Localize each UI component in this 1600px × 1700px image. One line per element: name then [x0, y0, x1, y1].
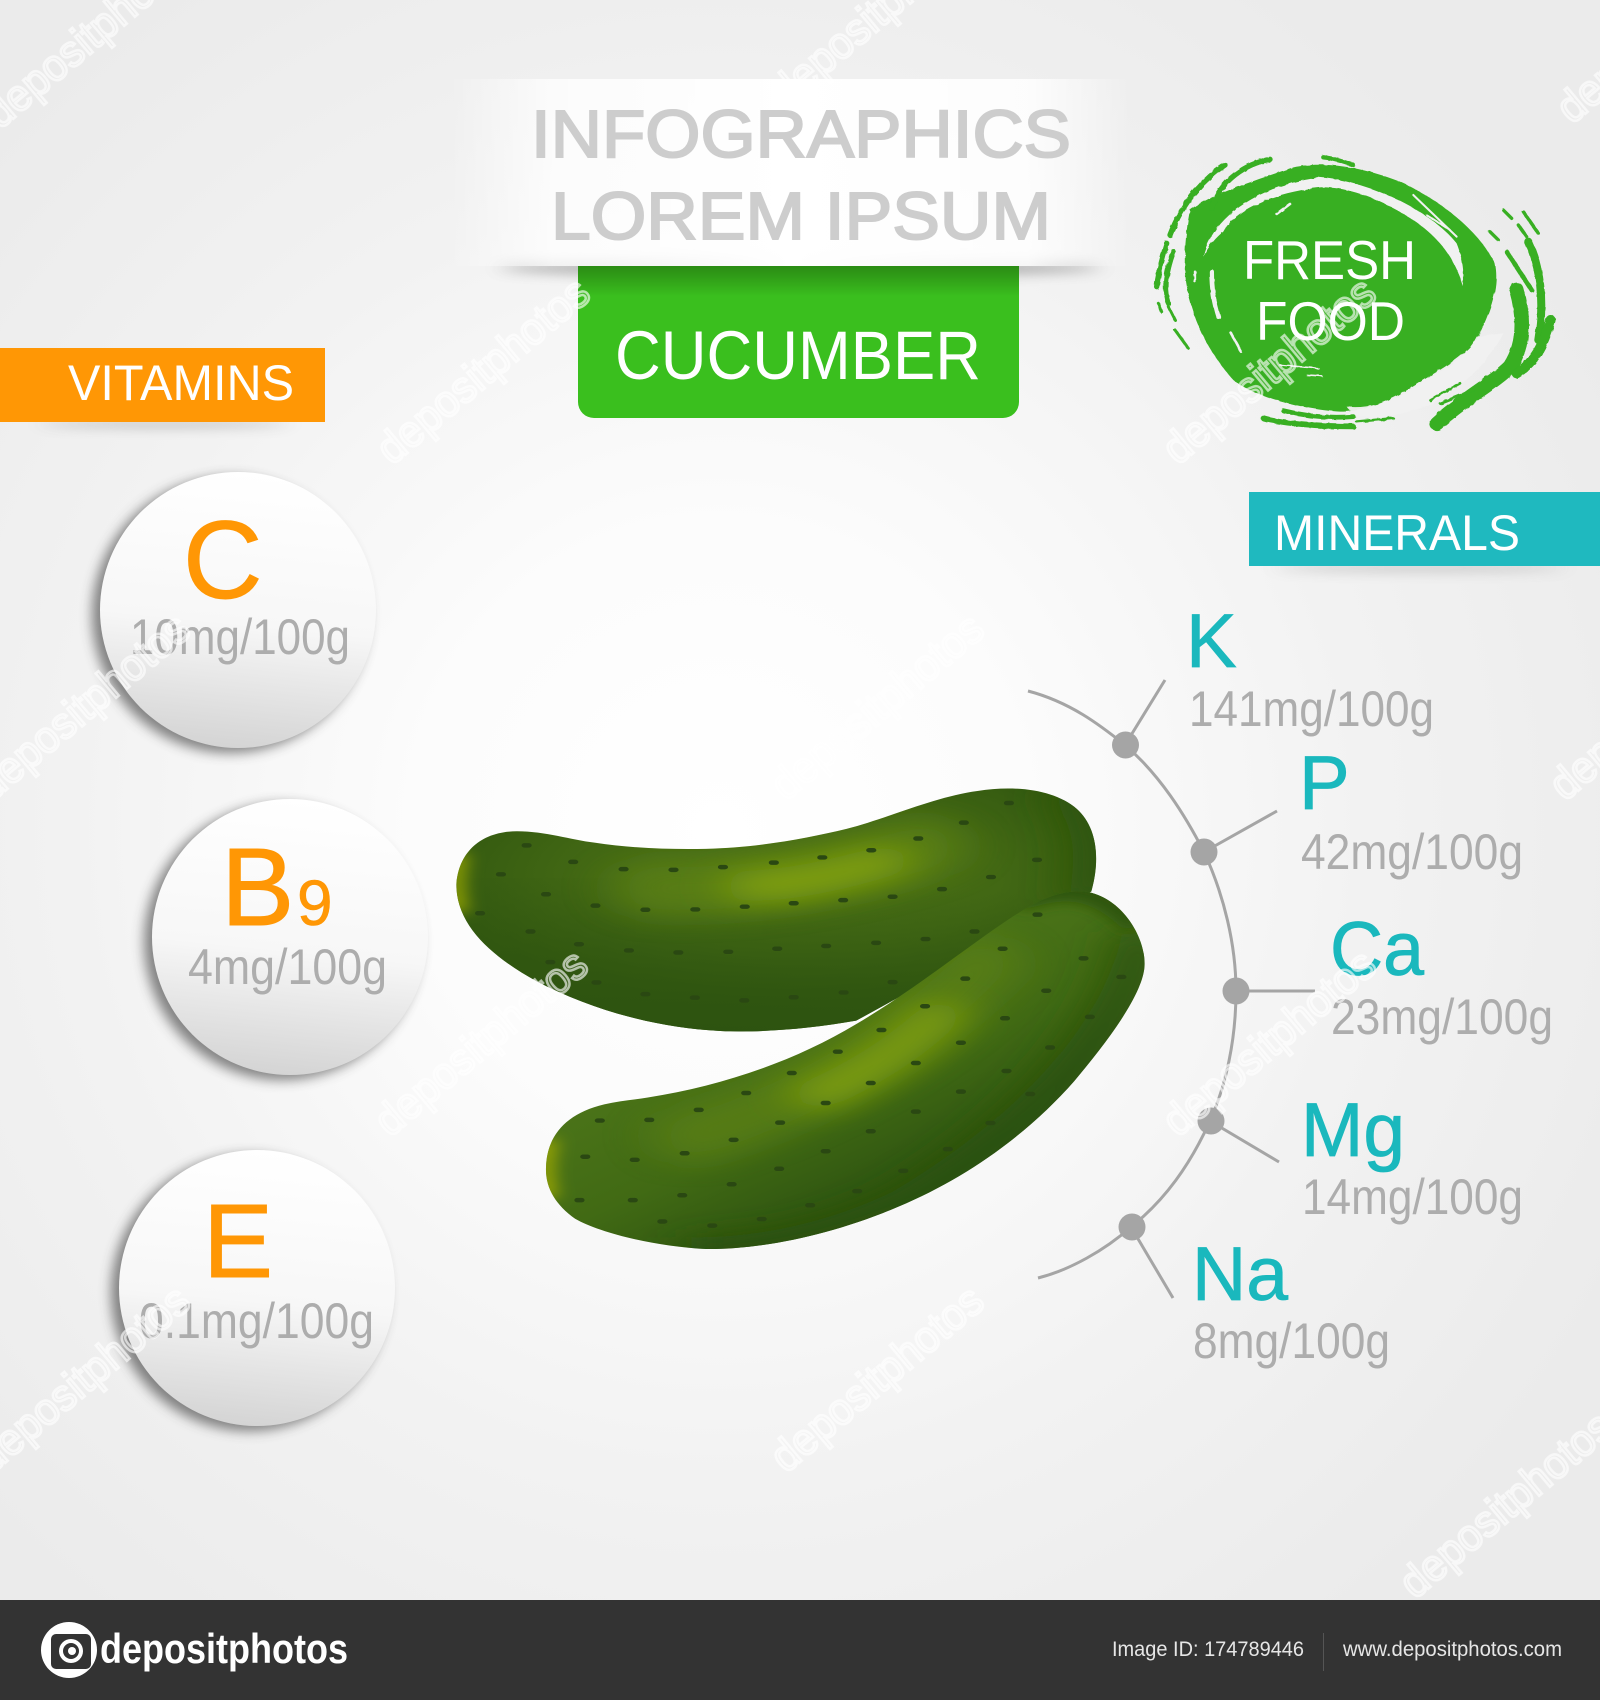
stock watermark overlay: depositphotos [365, 940, 597, 1146]
stamp text: fresh food [1243, 229, 1416, 352]
vitamin E badge: E [203, 1183, 273, 1300]
mineral P [1299, 741, 1523, 880]
footer brand text: depositphotos [100, 1625, 348, 1672]
icon: fresh food stamp [1157, 157, 1551, 427]
vitamin B9 badge: 4mg/100g [188, 939, 387, 995]
panel: minerals label: MINERALS [1274, 505, 1520, 561]
vitamin C badge: 10mg/100g [130, 609, 350, 665]
mineral Mg: Mg [1301, 1088, 1405, 1173]
mineral Mg: 14mg/100g [1302, 1169, 1523, 1225]
heading: cucumber: CUCUMBER [615, 317, 981, 394]
vitamin B9 badge [144, 799, 428, 1080]
vitamin C badge [92, 472, 376, 753]
back cucumber [456, 788, 1096, 1032]
mineral Ca: Ca [1330, 907, 1425, 992]
vitamin B9 badge: 9 [297, 867, 333, 939]
illustration: cucumbers [420, 785, 1145, 1253]
panel: minerals label [1249, 492, 1600, 571]
panel: title card [450, 79, 1130, 266]
mineral Na [1192, 1232, 1390, 1369]
mineral P: 42mg/100g [1301, 824, 1523, 880]
mineral K: K [1186, 599, 1237, 684]
footer website: www.depositphotos.com [1342, 1638, 1562, 1661]
stock watermark overlay: depositphotos [367, 268, 599, 474]
front cucumber [539, 891, 1145, 1253]
stock watermark overlay: depositphotos [1153, 940, 1385, 1146]
panel: vitamins label: VITAMINS [68, 355, 294, 411]
mineral Ca: 23mg/100g [1331, 989, 1553, 1045]
panel: title card shadow [500, 259, 1100, 277]
footer bar [0, 1600, 1600, 1700]
mineral arc diagram [1028, 680, 1315, 1298]
stock watermark overlay: depositphotos [761, 1276, 993, 1482]
panel: cucumber ribbon [578, 266, 1019, 418]
mineral Na: 8mg/100g [1193, 1313, 1390, 1369]
vitamin C badge: C [183, 499, 262, 622]
panel: vitamins label [0, 348, 325, 427]
stamp text: fresh food: FOOD [1256, 290, 1405, 352]
mineral Mg [1301, 1088, 1523, 1225]
mineral Ca [1330, 907, 1553, 1045]
mineral P: P [1299, 741, 1350, 826]
stamp text: fresh food: FRESH [1243, 229, 1416, 291]
node dots [1112, 732, 1250, 1240]
title [531, 97, 1071, 254]
vitamin B9 badge: B [221, 826, 294, 949]
icon: depositphotos logo [41, 1622, 97, 1678]
stock watermark overlay: depositphotos [1153, 268, 1385, 474]
vitamin E badge [111, 1150, 395, 1431]
mineral Na: Na [1192, 1232, 1289, 1317]
stock watermark overlay: depositphotos [761, 604, 993, 810]
mineral K: 141mg/100g [1189, 681, 1434, 737]
footer image id: Image ID: 174789446 [1112, 1638, 1304, 1661]
title: LOREM IPSUM [551, 179, 1051, 254]
title: INFOGRAPHICS [531, 97, 1071, 172]
vitamin E badge: 0.1mg/100g [139, 1293, 374, 1349]
spoke lines [1125, 680, 1315, 1298]
mineral K [1186, 599, 1434, 737]
